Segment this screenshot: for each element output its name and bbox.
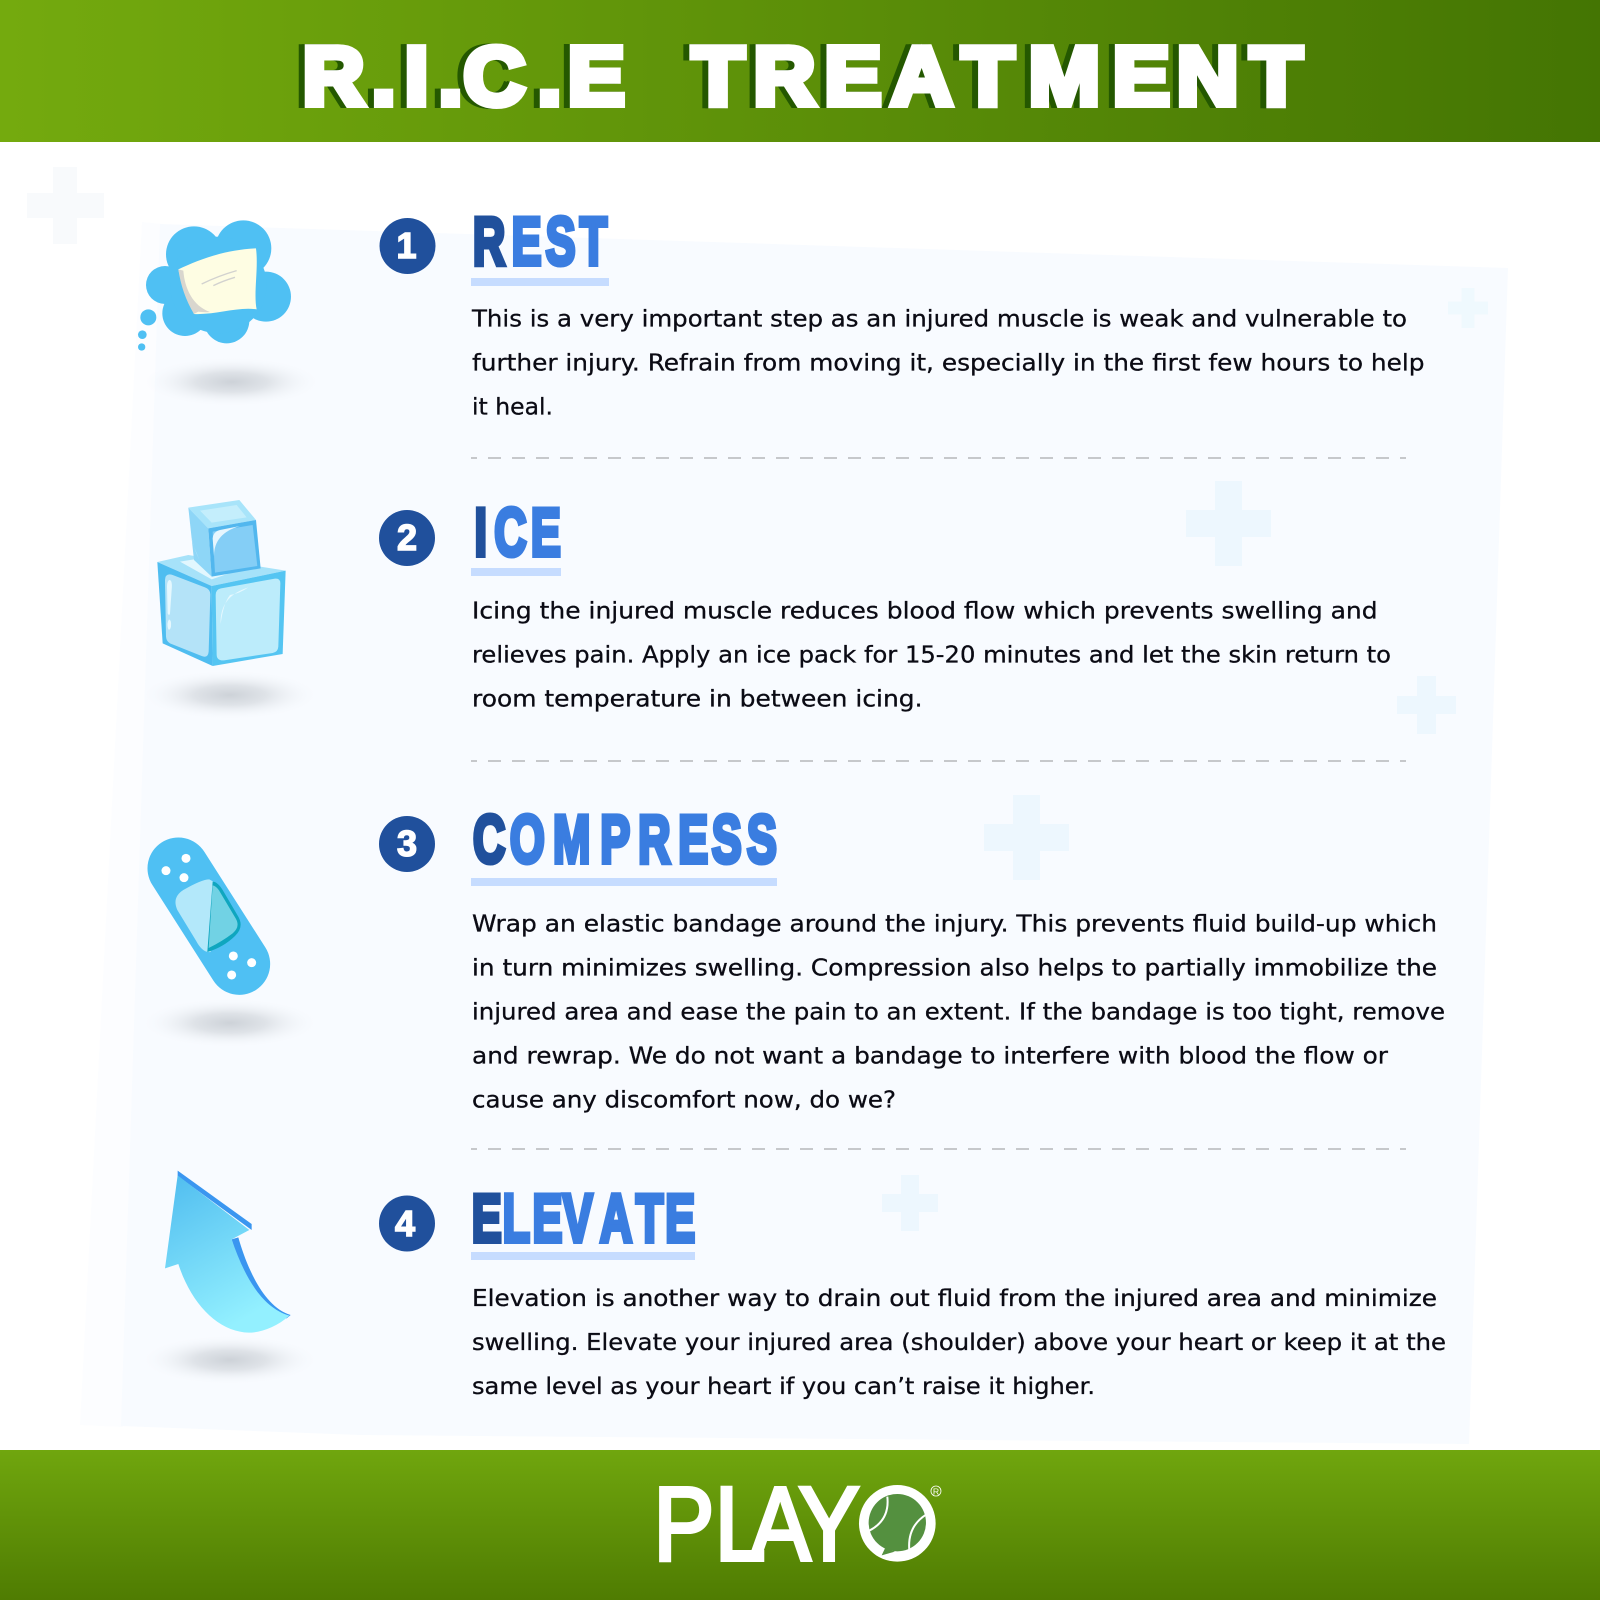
body text: compress: injured area and ease the pain to an extent. If the bandage is too tight, remove bbox=[472, 999, 1445, 1025]
body text: elevate: swelling. Elevate your injured area (shoulder) above your heart or keep it at the bbox=[472, 1330, 1446, 1356]
section 1: rest bbox=[380, 204, 1424, 420]
decorative plus: top left bbox=[27, 167, 104, 244]
body text: compress: Wrap an elastic bandage around the injury. This prevents fluid build-up which bbox=[472, 911, 1437, 937]
heading underline bbox=[471, 878, 777, 886]
body text: rest: it heal. bbox=[472, 394, 553, 420]
title: R.I.C.E bbox=[303, 30, 625, 122]
title shadow: TREATMENT bbox=[689, 30, 1299, 122]
heading: REST: REST bbox=[473, 204, 607, 280]
decorative plus: top right bbox=[1448, 288, 1488, 328]
number badge 4: 4 bbox=[395, 1203, 415, 1244]
decorative plus: ice right bbox=[1186, 481, 1271, 566]
logo: PLAYO: PLAY bbox=[653, 1465, 860, 1582]
number badge 2: 2 bbox=[397, 517, 417, 558]
heading: ELEVATE: ELEVATE bbox=[472, 1181, 695, 1257]
number badge 3 bbox=[379, 816, 435, 872]
icon: pillow in thought cloud bbox=[138, 220, 291, 351]
body text: rest bbox=[471, 306, 1424, 420]
icon: bandage bbox=[161, 854, 256, 979]
body text: rest: further injury. Refrain from moving it, especially in the first few hours to help bbox=[472, 350, 1424, 376]
number badge 1: 1 bbox=[396, 225, 417, 266]
decorative plus: compress bbox=[984, 795, 1069, 880]
heading underline bbox=[471, 278, 609, 286]
body text: elevate bbox=[472, 1286, 1446, 1400]
heading: ICE: ICE bbox=[474, 495, 561, 571]
section 2: ice bbox=[379, 495, 1391, 712]
title bbox=[303, 30, 1302, 122]
body text: ice: relieves pain. Apply an ice pack for 15-20 minutes and let the skin return to bbox=[472, 642, 1391, 668]
title shadow bbox=[297, 30, 1299, 122]
body text: ice: room temperature in between icing. bbox=[472, 686, 922, 712]
title shadow: R.I.C.E bbox=[297, 30, 619, 122]
shadow under ice icon bbox=[140, 670, 320, 720]
number badge 3: 3 bbox=[397, 823, 417, 864]
logo: PLAYO: R bbox=[933, 1486, 939, 1496]
body text: ice: Icing the injured muscle reduces blood flow which prevents swelling and bbox=[472, 598, 1378, 624]
body text: ice bbox=[472, 598, 1391, 712]
section 3: compress bbox=[379, 802, 1445, 1113]
section 4: elevate bbox=[379, 1181, 1446, 1400]
title shadow: TREATMENT bbox=[686, 30, 1296, 122]
body text: compress: in turn minimizes swelling. Compression also helps to partially immobilize the bbox=[472, 955, 1437, 981]
decorative plus: elevate bbox=[882, 1175, 938, 1231]
body text: elevate: same level as your heart if you can’t raise it higher. bbox=[472, 1374, 1095, 1400]
body text: compress bbox=[472, 911, 1445, 1113]
body text: rest: This is a very important step as an injured muscle is weak and vulnerable to bbox=[471, 306, 1407, 332]
number badge 4 bbox=[379, 1196, 435, 1252]
body text: elevate: Elevation is another way to drain out fluid from the injured area and minimize bbox=[472, 1286, 1437, 1312]
number badge 1 bbox=[380, 218, 436, 274]
heading underline bbox=[471, 1252, 695, 1260]
background panel bbox=[80, 222, 1508, 1444]
decorative plus: ice far right bbox=[1397, 676, 1456, 734]
title shadow: R.I.C.E bbox=[300, 30, 622, 122]
shadow under pillow icon bbox=[142, 357, 322, 407]
heading underline bbox=[471, 568, 561, 576]
number badge 2 bbox=[379, 510, 435, 566]
shadow under arrow icon bbox=[140, 1335, 320, 1385]
footer banner bbox=[0, 1450, 1600, 1600]
icon: ice cubes bbox=[157, 500, 286, 666]
title: TREATMENT bbox=[692, 30, 1302, 122]
heading: COMPRESS: COMPRESS bbox=[473, 802, 777, 878]
body text: compress: and rewrap. We do not want a bandage to interfere with blood the flow or bbox=[472, 1043, 1389, 1069]
header banner bbox=[0, 0, 1600, 142]
shadow under bandage icon bbox=[140, 998, 320, 1048]
body text: compress: cause any discomfort now, do we? bbox=[472, 1087, 896, 1113]
icon: elevate arrow bbox=[165, 1171, 291, 1333]
